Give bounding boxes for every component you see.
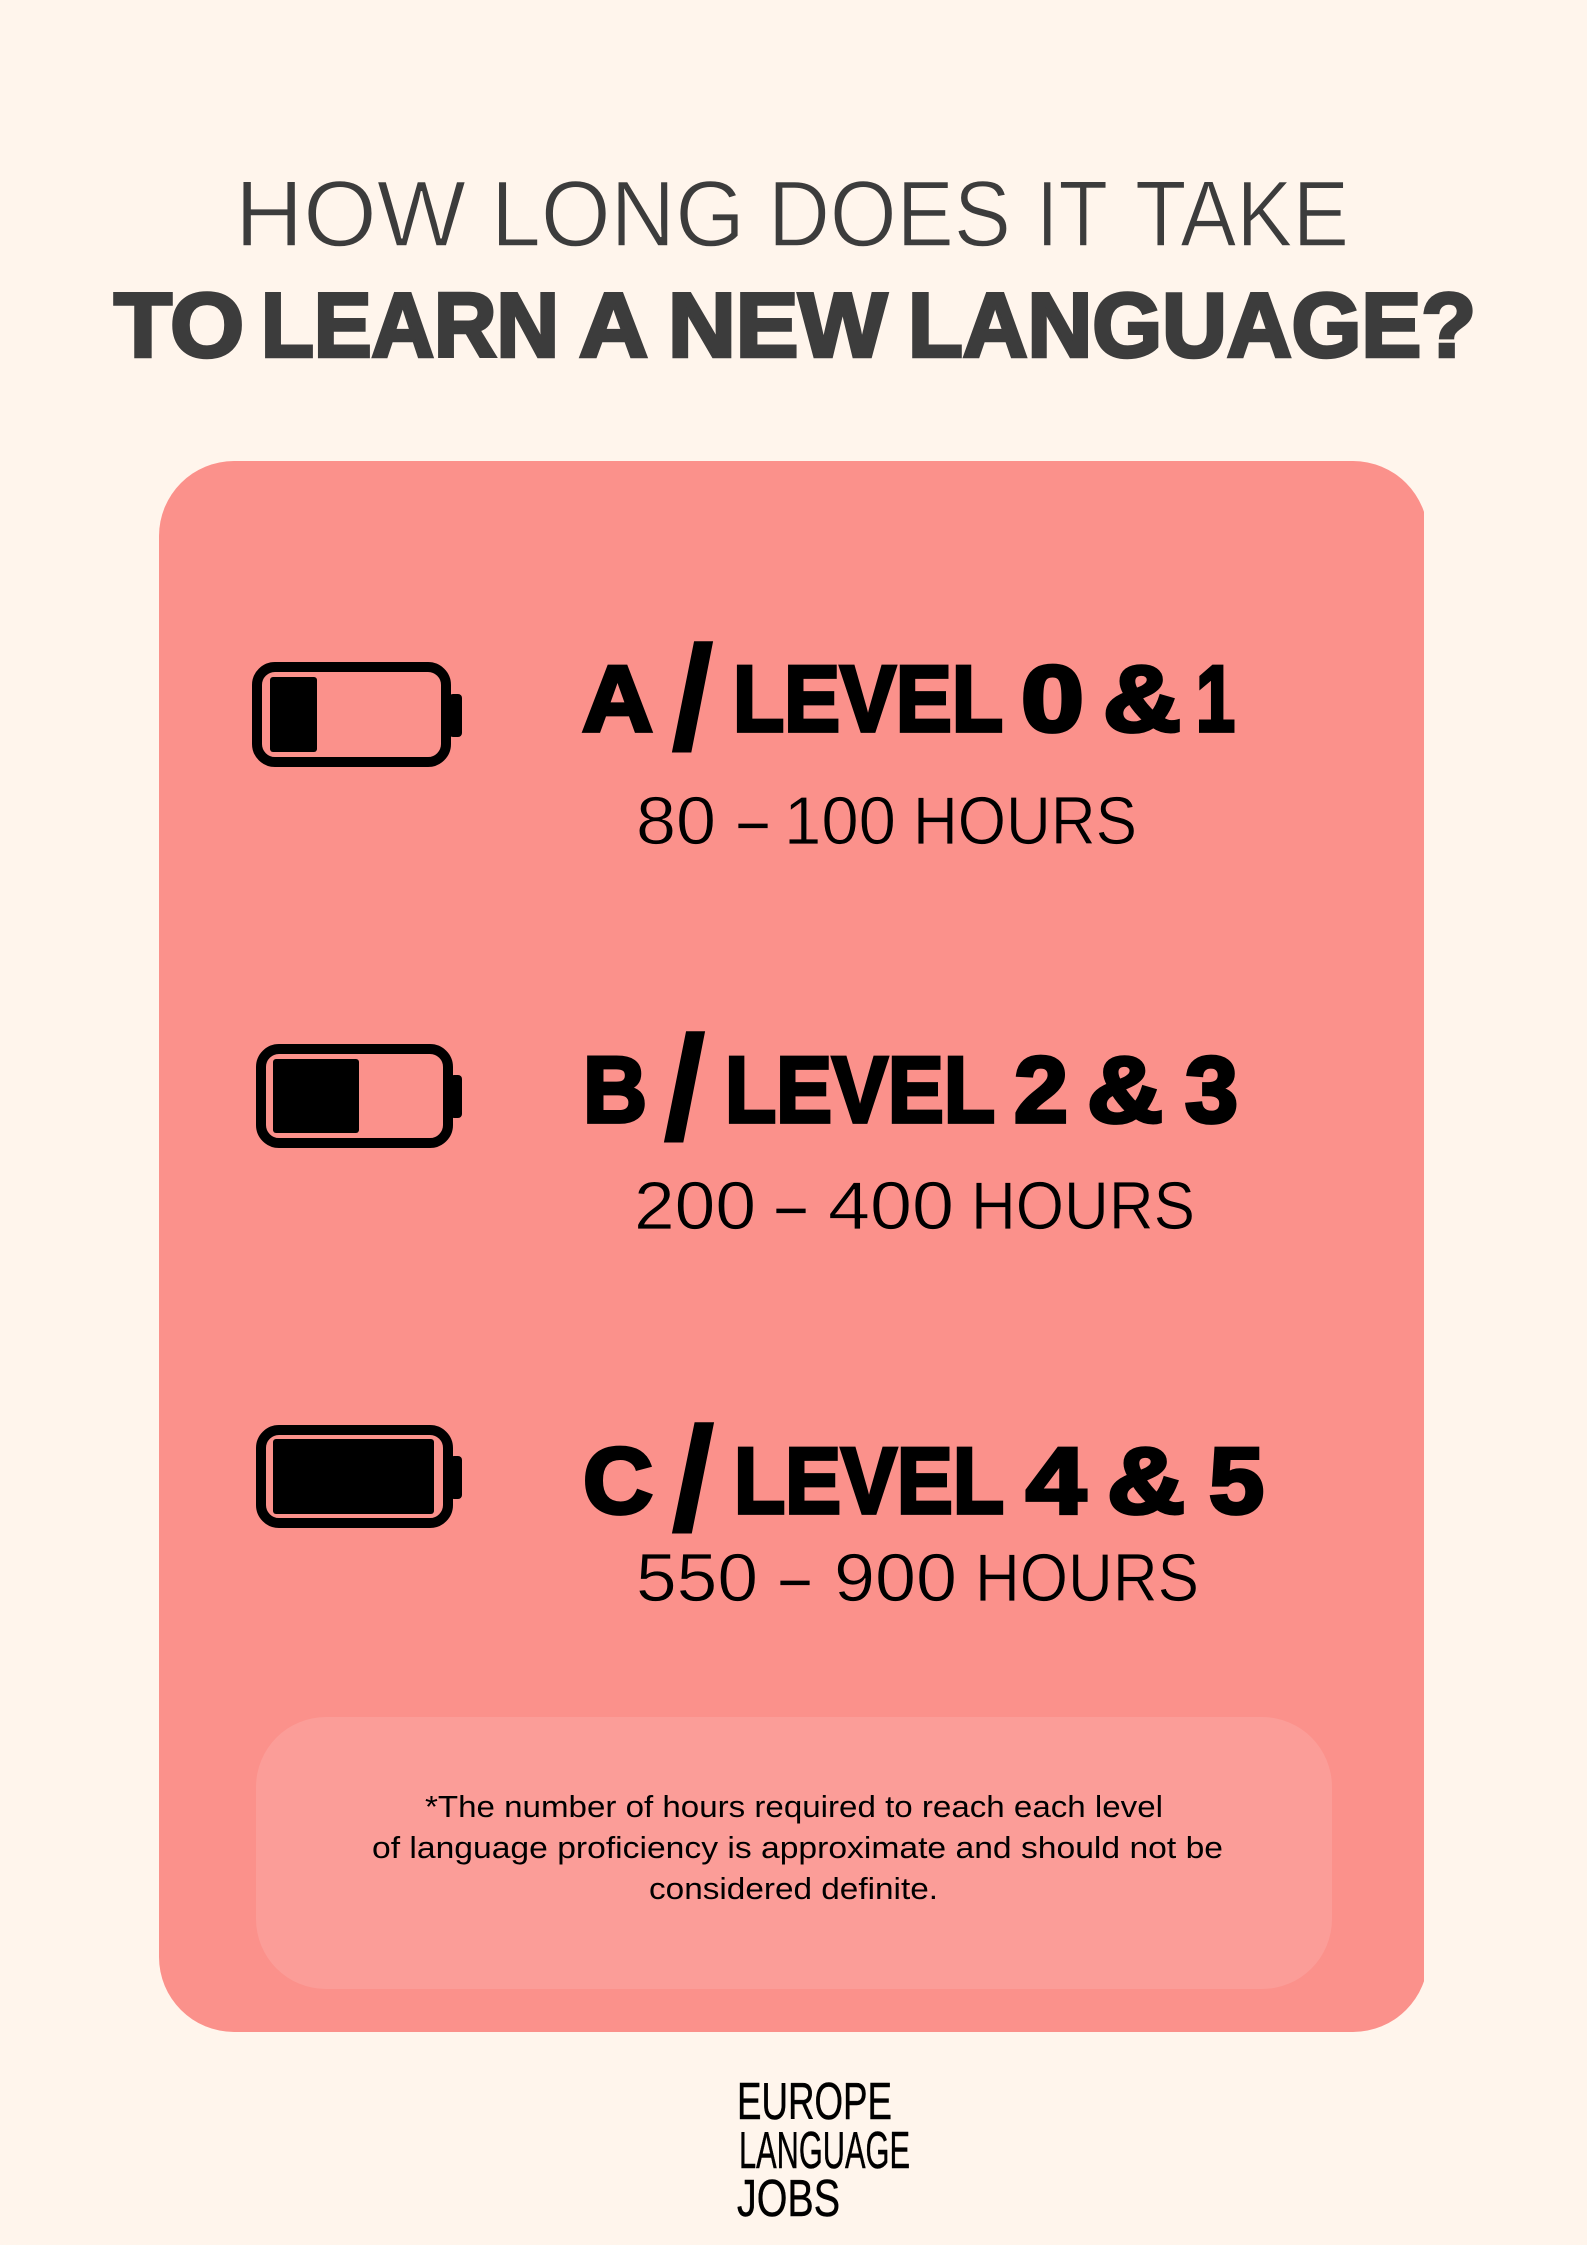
heading: level B: LEVEL (725, 1037, 995, 1142)
title line 1: HOW (235, 161, 466, 266)
title (114, 161, 1476, 376)
heading: level A: 1 (1196, 646, 1235, 751)
disclaimer text: *The number of hours required to reach each level (425, 1790, 1163, 1824)
title line 2: NEW (668, 276, 887, 376)
disclaimer text: considered definite. (649, 1872, 938, 1906)
heading: level B: 3 (1185, 1037, 1238, 1142)
level B row (261, 1006, 1238, 1244)
heading: level C: 4 (1026, 1428, 1086, 1533)
heading: level C: LEVEL (734, 1428, 1004, 1533)
title line 2 (114, 276, 1476, 376)
heading: level C: & (1107, 1428, 1185, 1533)
heading: level A (582, 616, 1235, 781)
disclaimer text (372, 1790, 1223, 1906)
logo: EUROPE (737, 2073, 892, 2131)
disclaimer text: of language proficiency is approximate and should not be (372, 1831, 1223, 1865)
title line 1: DOES (768, 161, 1011, 266)
title line 1 (235, 161, 1349, 266)
heading: level A: / (671, 616, 714, 781)
heading: level B: B (583, 1037, 647, 1142)
panel: levels (159, 461, 1428, 2032)
hours: level B (634, 1168, 1195, 1244)
heading: level C: C (583, 1428, 653, 1533)
title line 2: LEARN (261, 276, 559, 376)
hours: level A: 100 (784, 783, 896, 859)
hours: level C: 550 (636, 1540, 758, 1616)
icon: battery low (257, 667, 462, 762)
hours: level B: - (770, 1168, 812, 1244)
hours: level C (636, 1540, 1199, 1616)
hours: level A: - (732, 783, 774, 859)
heading: level A: LEVEL (733, 646, 1003, 751)
title line 2: A (579, 276, 648, 376)
hours: level C: - (774, 1540, 816, 1616)
hours: level A (636, 783, 1137, 859)
heading: level B: / (663, 1006, 706, 1171)
logo: JOBS (737, 2170, 840, 2228)
level C row (261, 1397, 1264, 1616)
icon: battery full (261, 1430, 462, 1523)
heading: level B (583, 1006, 1238, 1171)
heading: level A: A (582, 646, 653, 751)
hours: level B: 200 (634, 1168, 756, 1244)
hours: level C: 900 (834, 1540, 957, 1616)
heading: level C (583, 1397, 1264, 1562)
title line 2: LANGUAGE? (908, 276, 1476, 376)
logo: LANGUAGE (739, 2122, 910, 2180)
logo (737, 2073, 910, 2228)
hours: level B: 400 (828, 1168, 954, 1244)
hours: level A: HOURS (913, 783, 1137, 859)
level A row (257, 616, 1235, 859)
heading: level A: & (1103, 646, 1181, 751)
heading: level A: 0 (1021, 646, 1084, 751)
title line 1: IT (1036, 161, 1108, 266)
callout: disclaimer (256, 1717, 1332, 1989)
heading: level C: / (671, 1397, 715, 1562)
icon: battery medium (261, 1049, 462, 1143)
hours: level B: HOURS (971, 1168, 1195, 1244)
heading: level B: 2 (1014, 1037, 1068, 1142)
heading: level C: 5 (1209, 1428, 1264, 1533)
heading: level B: & (1087, 1037, 1163, 1142)
title line 1: LONG (491, 161, 745, 266)
title line 2: TO (114, 276, 244, 376)
hours: level A: 80 (636, 783, 716, 859)
hours: level C: HOURS (975, 1540, 1199, 1616)
title line 1: TAKE (1135, 161, 1349, 266)
